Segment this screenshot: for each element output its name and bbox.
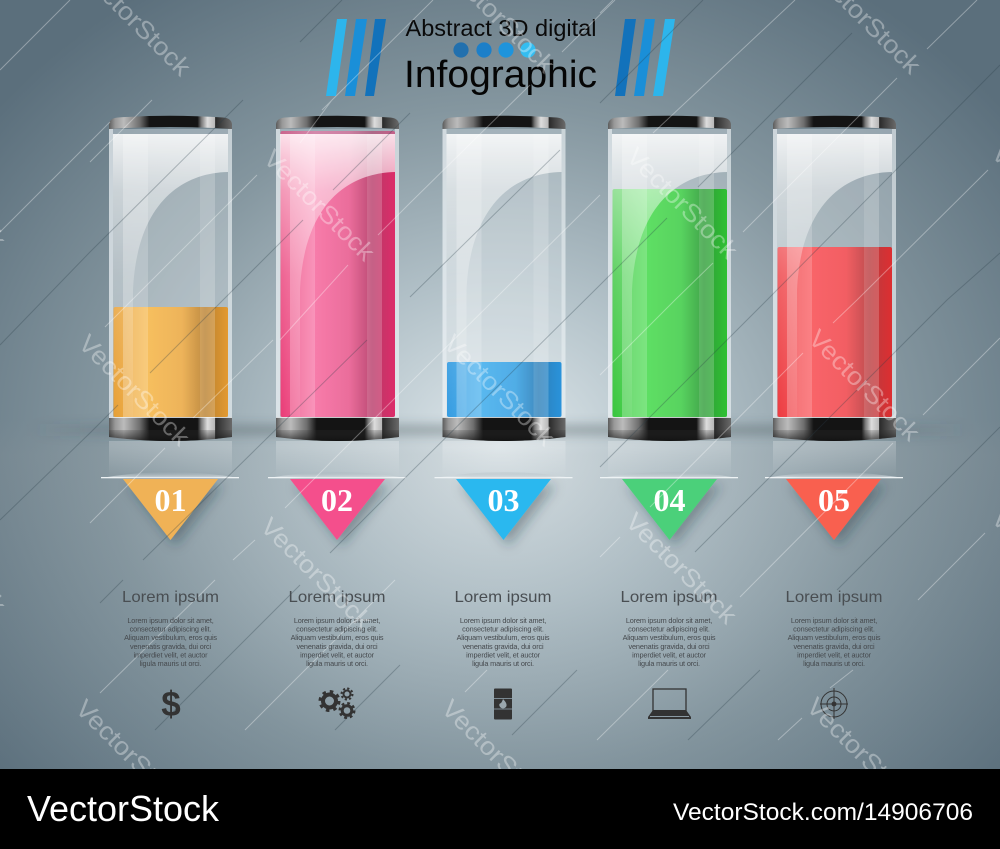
heading 02: Lorem ipsum xyxy=(288,589,386,606)
icon: oil barrel xyxy=(494,688,512,720)
body 03: consectetur adipiscing elit. xyxy=(462,625,544,634)
subtitle: Abstract 3D digital xyxy=(406,15,596,41)
footer logo text: VectorStock xyxy=(27,788,220,829)
body 04: venenatis gravida, dui orci xyxy=(628,642,710,651)
floor xyxy=(0,420,1000,769)
battery 04 xyxy=(600,116,738,478)
title dots xyxy=(453,42,536,58)
marker 02: 02 xyxy=(321,482,353,518)
body 01: venenatis gravida, dui orci xyxy=(130,642,212,651)
level fill 01 xyxy=(114,307,228,417)
body 05: consectetur adipiscing elit. xyxy=(793,625,875,634)
footer url text: VectorStock.com/14906706 xyxy=(673,799,973,826)
marker 01: 01 xyxy=(154,482,186,518)
battery 03 xyxy=(434,116,572,478)
body 05: venenatis gravida, dui orci xyxy=(794,642,875,651)
body 01: imperdiet velit, et auctor xyxy=(134,650,208,659)
body 04: Lorem ipsum dolor sit amet, xyxy=(626,616,712,625)
body 03: Lorem ipsum dolor sit amet, xyxy=(460,616,546,625)
marker 05 xyxy=(786,479,881,540)
column 03 text xyxy=(454,589,552,668)
body 04: Aliquam vestibulum, eros quis xyxy=(623,633,716,642)
body 04: ligula mauris ut orci. xyxy=(638,659,700,668)
icon: laptop xyxy=(648,689,691,719)
body 02: Lorem ipsum dolor sit amet, xyxy=(294,616,380,625)
marker 04: 04 xyxy=(654,482,686,518)
body 03: Aliquam vestibulum, eros quis xyxy=(457,633,550,642)
body 05: imperdiet velit, et auctor xyxy=(797,650,872,659)
watermarks: VectorStock xyxy=(255,512,377,635)
title stripes left xyxy=(326,19,386,96)
icon: gears xyxy=(320,688,354,718)
column 01 text xyxy=(122,589,219,668)
body 01: consectetur adipiscing elit. xyxy=(130,625,211,634)
watermarks: VectorStock xyxy=(73,329,195,452)
body 01: Aliquam vestibulum, eros quis xyxy=(124,633,217,642)
body 03: ligula mauris ut orci. xyxy=(472,659,534,668)
title stripes right xyxy=(615,19,675,96)
title xyxy=(326,15,675,96)
body 04: consectetur adipiscing elit. xyxy=(628,625,710,634)
watermarks: VectorStock xyxy=(258,144,380,267)
watermarks: VectorStock xyxy=(803,324,925,447)
level fill 02 xyxy=(280,131,395,417)
heading 03: Lorem ipsum xyxy=(454,589,552,606)
body 02: venenatis gravida, dui orci xyxy=(296,642,378,651)
marker 01 xyxy=(123,479,218,540)
marker 02 xyxy=(290,479,385,540)
marker 03: 03 xyxy=(488,482,520,518)
icon: target xyxy=(820,688,848,719)
body 02: ligula mauris ut orci. xyxy=(306,659,368,668)
body 05: Lorem ipsum dolor sit amet, xyxy=(791,616,877,625)
body 02: Aliquam vestibulum, eros quis xyxy=(291,633,384,642)
heading 01: Lorem ipsum xyxy=(122,589,219,606)
battery 05 xyxy=(765,116,903,478)
heading 04: Lorem ipsum xyxy=(620,589,718,606)
body 02: imperdiet velit, et auctor xyxy=(300,650,375,659)
watermarks: VectorStock xyxy=(70,694,192,817)
watermarks: VectorStock xyxy=(438,329,560,452)
icon: dollar: $ xyxy=(161,685,181,724)
body 04: imperdiet velit, et auctor xyxy=(632,650,707,659)
battery 02 xyxy=(268,116,406,478)
body 03: venenatis gravida, dui orci xyxy=(462,642,544,651)
watermarks: VectorStock xyxy=(801,692,923,815)
watermarks: VectorStock xyxy=(436,694,558,817)
body 05: ligula mauris ut orci. xyxy=(803,659,865,668)
body 01: Lorem ipsum dolor sit amet, xyxy=(127,616,214,625)
column 05 text xyxy=(786,589,882,668)
body 05: Aliquam vestibulum, eros quis xyxy=(788,633,881,642)
column 04 text xyxy=(620,589,718,668)
floor shadow xyxy=(30,424,970,436)
footer bar xyxy=(0,769,1000,849)
battery 01 xyxy=(101,116,239,478)
level fill 04 xyxy=(612,189,727,417)
body 03: imperdiet velit, et auctor xyxy=(466,650,541,659)
level fill 05 xyxy=(778,247,892,417)
watermarks: VectorStock xyxy=(621,142,743,265)
body 02: consectetur adipiscing elit. xyxy=(296,625,378,634)
marker 05: 05 xyxy=(818,482,850,518)
watermarks: VectorStock xyxy=(620,507,742,630)
marker 04 xyxy=(622,479,717,540)
column 02 text xyxy=(288,589,386,668)
main title: Infographic xyxy=(404,54,597,96)
marker 03 xyxy=(456,479,551,540)
body 01: ligula mauris ut orci. xyxy=(140,659,202,668)
heading 05: Lorem ipsum xyxy=(786,589,882,606)
level fill 03 xyxy=(447,362,562,417)
